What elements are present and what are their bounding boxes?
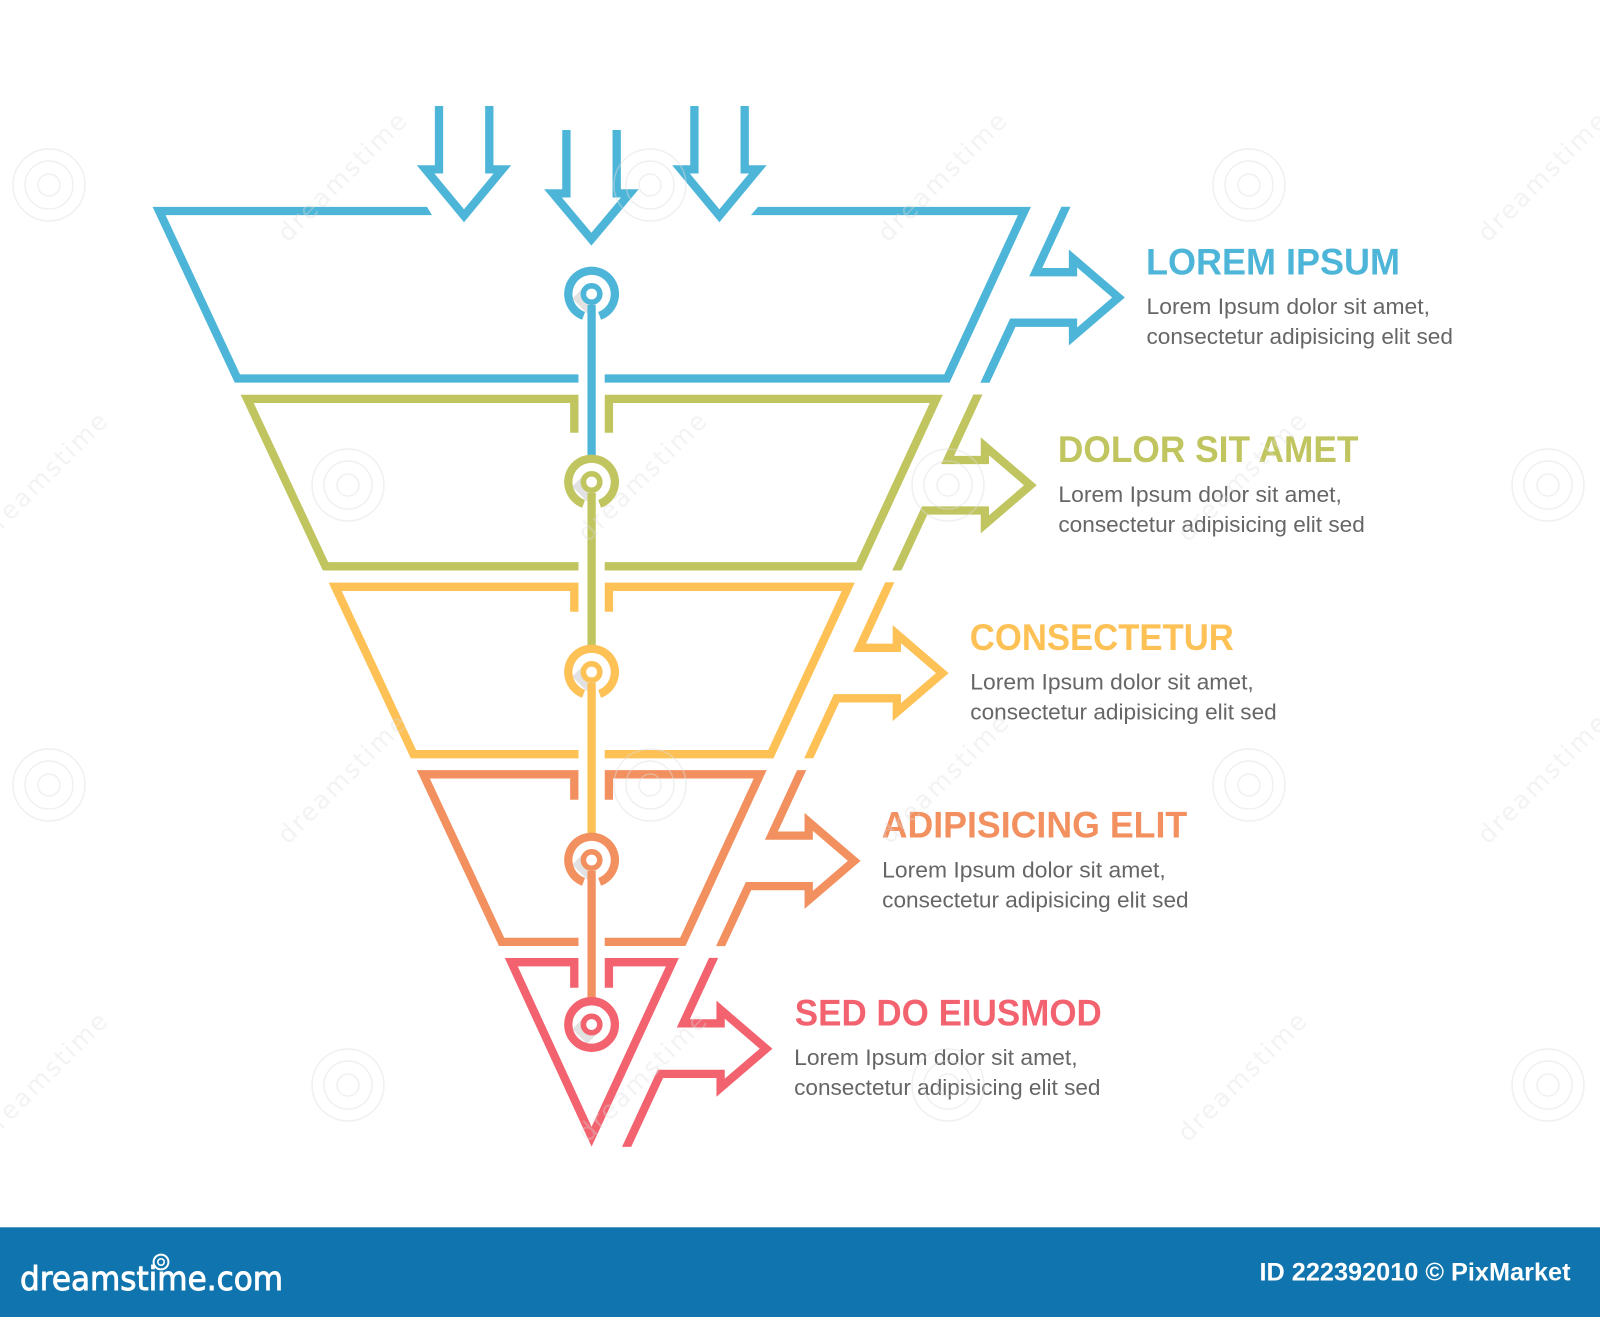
node and stem 2: green (568, 459, 615, 646)
arrow: input centre (553, 130, 630, 239)
logo spiral icon (154, 1255, 168, 1269)
tier 1: blue funnel band (159, 200, 1453, 389)
description: Lorem Ipsum dolor sit amet, (794, 1045, 1078, 1070)
description: consectetur adipisicing elit sed (882, 887, 1189, 912)
tier 3: yellow funnel band (335, 576, 1277, 765)
node and stem 3: yellow (568, 649, 615, 833)
description (882, 857, 1189, 912)
tier 2: green funnel band (247, 388, 1365, 577)
side arrow (806, 576, 942, 765)
footer logo: dreamstime.com (20, 1259, 283, 1298)
description (970, 670, 1277, 725)
description: Lorem Ipsum dolor sit amet, (882, 857, 1166, 882)
band outline (159, 207, 1024, 378)
heading: LOREM IPSUM (1146, 241, 1400, 282)
description: Lorem Ipsum dolor sit amet, (1146, 294, 1430, 319)
description: consectetur adipisicing elit sed (1058, 512, 1365, 537)
heading: CONSECTETUR (970, 617, 1234, 658)
watermark: dreamstime (872, 107, 1012, 247)
side arrow (622, 951, 766, 1156)
arrow: input right (681, 106, 758, 216)
band outline (423, 774, 760, 942)
band outline (335, 587, 848, 754)
input arrows (426, 106, 758, 239)
band outline (511, 962, 672, 1137)
side arrow (894, 388, 1030, 577)
heading: SED DO EIUSMOD (795, 993, 1102, 1034)
description (1146, 294, 1453, 349)
band outline (247, 399, 936, 566)
image credit: ID 222392010 © PixMarket (1260, 1259, 1571, 1287)
description (1058, 482, 1365, 537)
node 5: red (568, 1001, 615, 1048)
description: Lorem Ipsum dolor sit amet, (970, 670, 1254, 695)
watermark: dreamstime (1172, 407, 1312, 547)
footer bar (0, 1227, 1600, 1317)
watermark: dreamstime (1172, 1007, 1312, 1147)
heading: DOLOR SIT AMET (1058, 429, 1359, 470)
tier 5: red funnel tip (511, 951, 1102, 1156)
heading: ADIPISICING ELIT (882, 805, 1188, 846)
watermark (0, 107, 1600, 1147)
node and stem 1: blue (568, 271, 615, 456)
description: consectetur adipisicing elit sed (970, 700, 1277, 725)
watermark: dreamstime (874, 709, 1014, 849)
description: consectetur adipisicing elit sed (794, 1075, 1100, 1100)
arrow: input left (426, 106, 502, 216)
description: consectetur adipisicing elit sed (1146, 324, 1453, 349)
description: Lorem Ipsum dolor sit amet, (1058, 482, 1342, 507)
description (794, 1045, 1100, 1100)
side arrow (982, 200, 1118, 389)
watermark: dreamstime (272, 107, 412, 247)
node and stem 4: orange (568, 837, 615, 998)
watermark: dreamstime (572, 407, 712, 547)
side arrow (718, 763, 854, 952)
tier 4: orange funnel band (423, 763, 1189, 952)
watermark: dreamstime (572, 1007, 712, 1147)
watermark: dreamstime (272, 709, 412, 849)
